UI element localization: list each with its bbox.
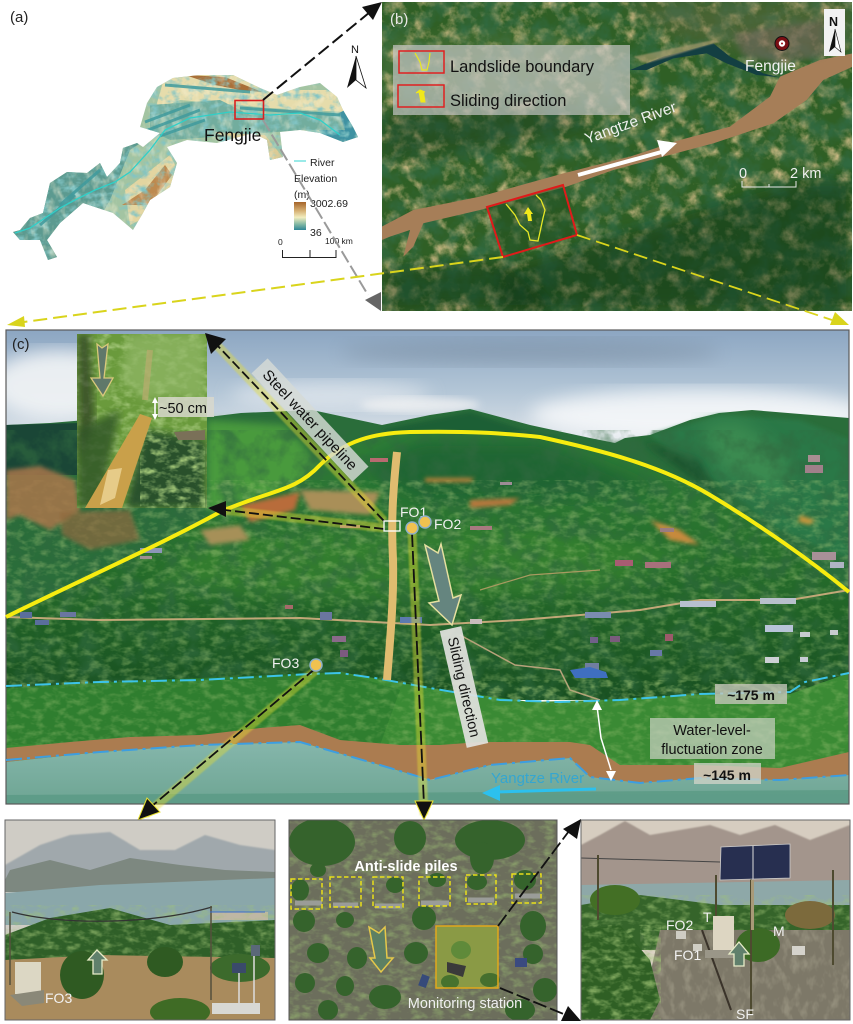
double arrow: fluctuation range xyxy=(592,700,616,781)
dashed arrow: locator to panel b black xyxy=(263,2,382,100)
scale bar 0-2 km: 2 km xyxy=(790,166,821,182)
red box: landslide location xyxy=(487,185,577,257)
dashed arrow: station to photo top xyxy=(498,819,581,926)
arrow: river flow xyxy=(578,140,677,175)
sensor labels: FO1 xyxy=(674,947,701,963)
mountains xyxy=(6,409,848,614)
anti-slide pile markers xyxy=(291,874,541,909)
monitoring point FO2: FO2 xyxy=(434,516,461,532)
arrow: sliding direction xyxy=(425,544,461,625)
sensor labels: M xyxy=(773,923,785,939)
legend: river and elevation: 36 xyxy=(310,227,322,239)
legend: sliding direction: Sliding direction xyxy=(450,92,566,110)
arrow: to pipeline inset top xyxy=(205,333,384,521)
dashed arrow: yellow left xyxy=(7,257,503,327)
panel label (a): (a) xyxy=(10,9,28,26)
satellite base with river xyxy=(382,0,853,311)
icon: north arrow xyxy=(347,44,366,88)
panel label (c): (c) xyxy=(12,336,30,353)
inset label about 50 cm: ~50 cm xyxy=(159,401,207,417)
elevation map of study region xyxy=(13,75,358,260)
dashed arrow: yellow right xyxy=(577,235,849,325)
mud bank xyxy=(6,725,849,788)
pile shadows xyxy=(295,896,540,906)
sensor labels: SF xyxy=(736,1006,754,1022)
sensor labels: FO2 xyxy=(666,917,693,933)
icon: north arrow white box xyxy=(824,9,845,56)
drawdown zone grass xyxy=(6,672,849,780)
selection rectangle on pipeline xyxy=(384,521,400,531)
legend: river and elevation: Elevation xyxy=(294,173,337,185)
monitoring station box xyxy=(436,926,498,988)
label water-level-fluctuation zone xyxy=(650,718,775,759)
legend: river and elevation: (m) xyxy=(294,189,310,201)
cabinet xyxy=(15,962,41,994)
drone photo scene xyxy=(289,818,557,1021)
industrial building xyxy=(570,667,608,678)
monitoring point FO3: FO3 xyxy=(272,655,299,671)
icon: sliding direction arrow xyxy=(524,207,533,221)
monitoring point FO1: FO1 xyxy=(400,504,427,520)
river network xyxy=(15,112,340,233)
icon: north arrow white box: N xyxy=(829,15,838,29)
sensor labels: T xyxy=(703,909,712,925)
label 145 m xyxy=(694,763,761,784)
panel label (b): (b) xyxy=(390,11,408,28)
panel (a): regional elevation map xyxy=(0,9,370,270)
label sliding direction xyxy=(440,626,488,748)
red locator box xyxy=(235,100,264,119)
town marker Fengjie xyxy=(745,36,796,75)
photo: FO3 site xyxy=(5,820,275,1024)
river water xyxy=(6,742,849,804)
label FO3 in photo: FO3 xyxy=(45,990,72,1006)
label steel water pipeline: Steel water pipeline xyxy=(259,367,360,474)
sensor labels xyxy=(666,909,785,1022)
scale bar 0-100 km: 0 xyxy=(278,237,283,247)
legend: river and elevation xyxy=(294,157,348,239)
legend: landslide boundary: Landslide boundary xyxy=(450,58,595,76)
arrow: FO3 to photo xyxy=(138,668,316,820)
inset photo: pipeline xyxy=(77,334,207,508)
landslide boundary outline xyxy=(506,195,545,241)
monitoring point FO1 xyxy=(400,504,427,534)
panel border xyxy=(6,330,849,804)
water level line 145 m xyxy=(6,742,849,783)
sensors xyxy=(232,963,246,973)
legend box xyxy=(393,45,630,115)
scale bar 0-2 km xyxy=(739,166,821,187)
slope xyxy=(6,432,849,700)
arrow in monitoring photo xyxy=(729,942,749,966)
steel water pipeline xyxy=(387,452,397,680)
landscape base xyxy=(0,330,853,804)
dashed arrow: locator to panel b gray xyxy=(263,120,381,311)
arrow: flow direction cyan xyxy=(482,785,596,801)
panel (b): satellite image xyxy=(382,0,853,311)
label Yangtze River cyan: Yangtze River xyxy=(491,770,584,787)
inset label about 50 cm xyxy=(152,397,214,420)
arrow in FO3 photo xyxy=(88,950,107,974)
scale bar 0-100 km xyxy=(278,236,353,258)
landslide boundary yellow curve xyxy=(6,432,849,617)
houses xyxy=(20,455,844,670)
label sliding direction: Sliding direction xyxy=(444,636,482,739)
arrow in drone photo xyxy=(369,927,393,972)
legend: sliding direction xyxy=(398,85,566,110)
photo: drone view of anti-slide piles xyxy=(289,818,557,1021)
legend: river and elevation: 3002.69 xyxy=(310,198,348,210)
dashed arrow: station to photo bottom xyxy=(500,988,581,1021)
monitoring point FO2 xyxy=(419,516,461,532)
road xyxy=(6,590,849,625)
monitoring point FO3 xyxy=(272,655,322,671)
leader: glow halo xyxy=(145,340,424,815)
label 145 m: ~145 m xyxy=(703,767,751,783)
water level line 175 m xyxy=(6,673,849,702)
photo: monitoring station xyxy=(581,820,850,1022)
label water-level-fluctuation zone: Water-level- xyxy=(673,723,751,739)
Yangtze reach xyxy=(382,53,853,257)
erosion and bare-soil patches xyxy=(6,466,815,550)
inset arrow: sliding direction xyxy=(91,344,113,396)
scale bar 0-2 km: 0 xyxy=(739,166,747,182)
icon: north arrow: N xyxy=(351,44,359,56)
label water-level-fluctuation zone: fluctuation zone xyxy=(661,742,763,758)
cabinet xyxy=(713,916,734,950)
scale bar 0-100 km: 100 km xyxy=(325,236,353,246)
monitoring photo scene xyxy=(581,820,850,1020)
label 175 m: ~175 m xyxy=(727,687,775,703)
legend: landslide boundary xyxy=(399,51,595,76)
station ground xyxy=(436,926,498,988)
label anti-slide piles: Anti-slide piles xyxy=(354,859,458,875)
panel (c): oblique drone view of landslide xyxy=(0,330,853,820)
label monitoring station: Monitoring station xyxy=(408,996,522,1012)
photo FO3 scene xyxy=(5,820,275,1024)
legend: river and elevation: River xyxy=(310,157,335,169)
arrow: FO1 to monitoring photo xyxy=(412,533,433,820)
arrow: to pipeline inset bottom xyxy=(208,501,384,529)
label Yangtze River: Yangtze River xyxy=(583,99,679,148)
label Fengjie: Fengjie xyxy=(204,125,261,145)
solar panel xyxy=(720,844,790,880)
label 175 m xyxy=(715,684,787,704)
pipe in photo xyxy=(85,414,152,508)
town marker Fengjie: Fengjie xyxy=(745,58,796,75)
